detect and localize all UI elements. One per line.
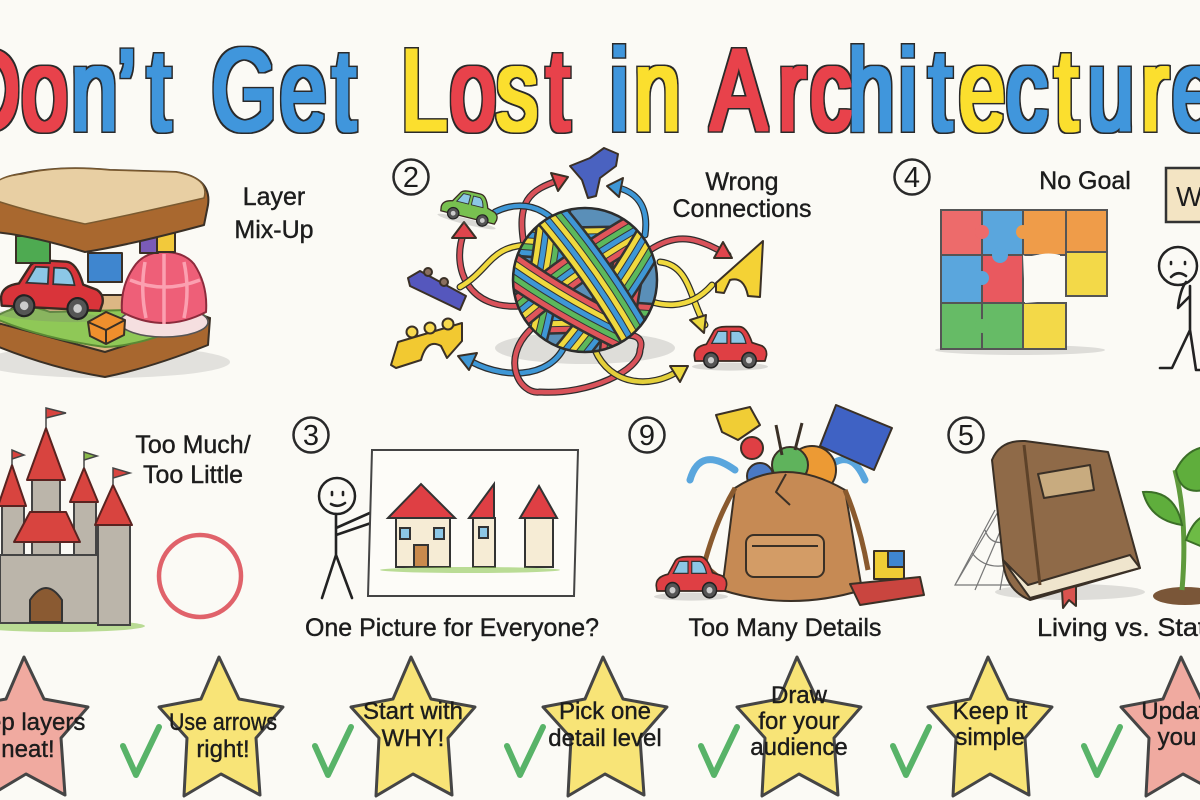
- number badge 2: [394, 160, 428, 194]
- icon: jelly mould: [120, 252, 208, 337]
- star: keep it simple: simple: [955, 724, 1025, 751]
- house big: [388, 484, 455, 567]
- label: too much too little: Too Little: [143, 461, 243, 489]
- title: u: [1088, 27, 1134, 155]
- title: o: [450, 27, 496, 155]
- label: layer mix-up: Layer: [243, 183, 305, 211]
- title: r: [1141, 27, 1169, 155]
- star: start with why: [351, 657, 475, 796]
- label: too many details: Too Many Details: [688, 614, 882, 642]
- icon: stack of books and cube: [850, 551, 924, 605]
- title: t: [1055, 27, 1078, 155]
- panel: castle: [0, 408, 145, 632]
- icon: empty red circle: [159, 535, 241, 617]
- icon: blue toy brick: [570, 148, 618, 198]
- cobweb: [955, 500, 1010, 590]
- title: [0, 27, 1200, 155]
- panel: overflowing backpack: [654, 405, 924, 605]
- star: keep layers neat: neat!: [1, 736, 55, 763]
- sign: [1166, 168, 1200, 222]
- house blank: [520, 486, 557, 567]
- title: L: [401, 27, 447, 155]
- title: t: [546, 27, 570, 155]
- star: draw for your audience: for your: [758, 708, 840, 735]
- castle flags: [12, 408, 130, 485]
- icon: red car: [692, 327, 768, 371]
- stick figure: [319, 478, 374, 598]
- star: start with why: Start with: [363, 698, 463, 725]
- label: wrong connections: Wrong: [705, 168, 779, 196]
- title: i: [899, 27, 917, 155]
- number badge 5: [948, 418, 984, 452]
- star: draw for your audience: Draw: [771, 682, 828, 709]
- title: i: [610, 27, 628, 155]
- title: e: [959, 27, 1005, 155]
- label: too much too little: Too Much/: [135, 431, 251, 459]
- panel: one picture stick figure and drawing: [319, 450, 578, 598]
- number badge 9: [630, 418, 664, 452]
- title: t: [148, 27, 171, 155]
- backpack body: [704, 472, 868, 601]
- title: n: [634, 27, 681, 155]
- check mark 3: [507, 727, 543, 775]
- icon: green block: [16, 230, 52, 263]
- yarn ball: [512, 206, 658, 354]
- icon: yellow toy brick: [391, 318, 462, 368]
- star: draw for your audience: [737, 657, 861, 796]
- panel: tangled yarn: [391, 148, 768, 392]
- house narrow: [469, 484, 495, 567]
- panel: layer mix-up sandwich: [0, 168, 230, 378]
- backpack contents: [716, 405, 892, 494]
- number badge 4: 4: [904, 162, 920, 194]
- label: layer mix-up: Mix-Up: [234, 216, 314, 244]
- icon: purple and yellow blocks: [140, 229, 175, 253]
- panel: growing plant: [1143, 447, 1200, 605]
- panel: confused stick figure with sign: [1159, 168, 1200, 370]
- star: draw for your audience: audience: [750, 734, 848, 761]
- title: G: [212, 27, 277, 155]
- icon: blue block: [88, 253, 122, 282]
- label: no goal: No Goal: [1039, 167, 1131, 195]
- title: s: [496, 27, 538, 155]
- yarn arrows: [452, 173, 732, 392]
- star: use arrows right: Use arrows: [169, 709, 277, 736]
- title: e: [280, 27, 326, 155]
- star: update as you go: [1121, 657, 1200, 796]
- title: t: [929, 27, 952, 155]
- star: use arrows right: right!: [196, 736, 250, 763]
- icon: yellow wedge: [716, 241, 763, 297]
- title: A: [711, 27, 767, 155]
- star: pick one detail level: detail level: [548, 725, 662, 752]
- number badge 4: [894, 160, 930, 194]
- check mark 1: [123, 727, 159, 775]
- label: one picture for everyone: One Picture for Everyone?: [305, 614, 599, 642]
- star: keep it simple: Keep it: [953, 698, 1028, 725]
- icon: red toy car: [654, 557, 728, 601]
- check mark 2: [315, 727, 351, 775]
- number badge 5: 5: [958, 420, 974, 452]
- icon: top bread: [0, 168, 208, 252]
- title: t: [333, 27, 356, 155]
- title: r: [778, 27, 806, 155]
- star: pick one detail level: [543, 657, 667, 796]
- star: use arrows right: [159, 657, 283, 796]
- icon: orange block: [88, 312, 125, 344]
- icon: red car: [0, 258, 107, 324]
- icon: green car: [437, 185, 503, 232]
- title: n: [71, 27, 118, 155]
- book: [992, 441, 1140, 608]
- number badge 3: 3: [303, 420, 319, 452]
- number badge 9: 9: [639, 420, 655, 452]
- panel: dusty book with web: [955, 441, 1145, 608]
- number badge 2: 2: [403, 162, 419, 194]
- title: c: [810, 27, 852, 155]
- title: o: [21, 27, 68, 155]
- check mark 4: [701, 727, 737, 775]
- paper sheet: [368, 450, 578, 596]
- title: c: [1006, 27, 1048, 155]
- icon: purple toy brick: [408, 268, 466, 310]
- star: start with why: WHY!: [382, 725, 444, 752]
- check mark 5: [893, 727, 929, 775]
- number badge 3: [294, 418, 328, 452]
- label: wrong connections: Connections: [673, 195, 811, 223]
- panel: unfinished puzzle: [935, 210, 1107, 355]
- star: pick one detail level: Pick one: [559, 698, 651, 725]
- star: keep it simple: [928, 657, 1052, 796]
- title: ’: [117, 27, 136, 155]
- star: keep layers neat: [0, 657, 88, 796]
- title: h: [848, 27, 894, 155]
- check mark 6: [1084, 727, 1120, 775]
